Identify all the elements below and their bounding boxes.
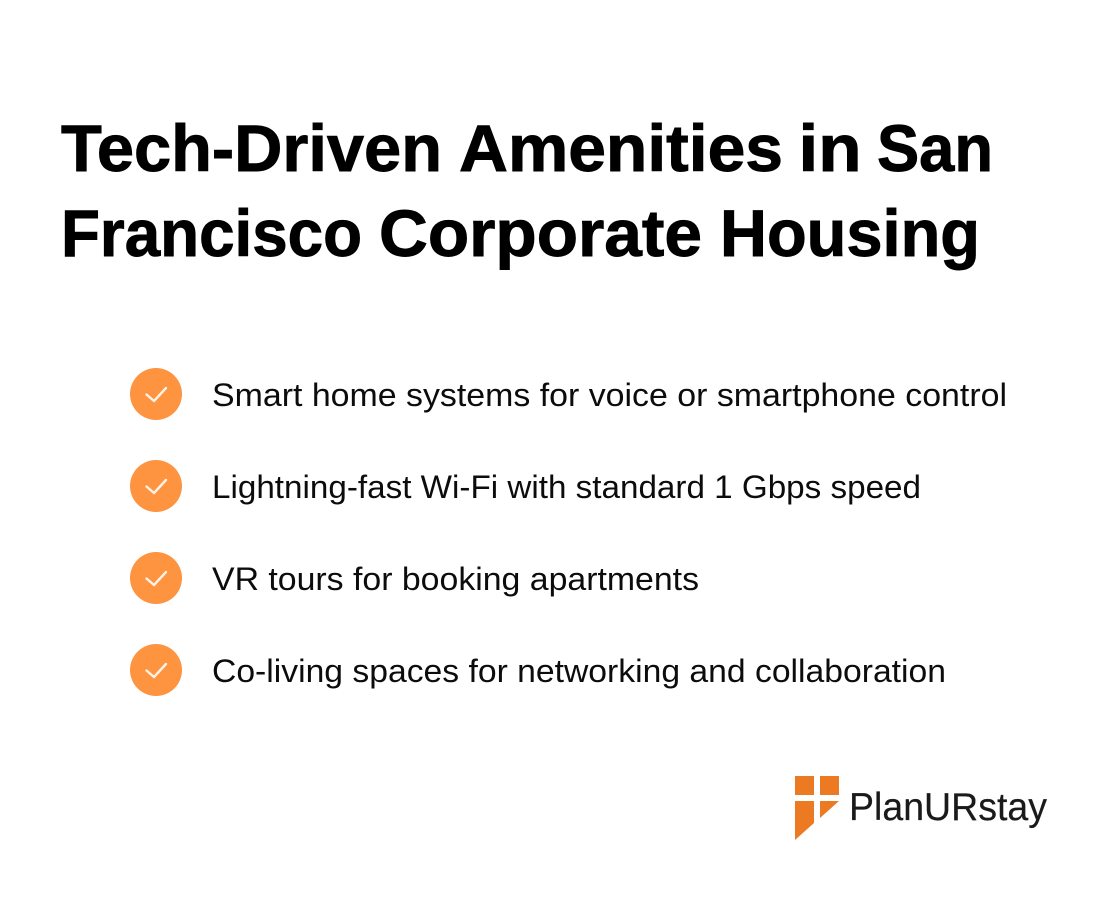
list item: smart home bbox=[130, 368, 1007, 420]
title: Amenities bbox=[459, 111, 783, 185]
title bbox=[61, 111, 993, 270]
list item: smart home: Smart home systems for voice or smartphone control bbox=[212, 377, 1007, 413]
icon: check bbox=[130, 552, 182, 604]
icon: logo mark bbox=[795, 776, 839, 840]
list item: VR tours: VR tours for booking apartments bbox=[212, 561, 699, 597]
icon: check bbox=[130, 368, 182, 420]
title: San bbox=[877, 111, 993, 185]
logo bbox=[795, 776, 1047, 840]
list item: VR tours bbox=[130, 552, 699, 604]
title: Housing bbox=[720, 196, 980, 270]
title: in bbox=[798, 111, 862, 185]
title: Tech-Driven bbox=[61, 111, 442, 185]
logo: PlanURstay bbox=[849, 786, 1047, 829]
title: Corporate bbox=[379, 196, 702, 270]
list item: wifi: Lightning-fast Wi-Fi with standard 1 Gbps speed bbox=[212, 469, 921, 505]
list item: co-living bbox=[130, 644, 946, 696]
list item: wifi bbox=[130, 460, 921, 512]
icon: check bbox=[130, 460, 182, 512]
title: Francisco bbox=[61, 196, 362, 270]
list item: co-living: Co-living spaces for networking and collaboration bbox=[212, 653, 946, 689]
icon: check bbox=[130, 644, 182, 696]
